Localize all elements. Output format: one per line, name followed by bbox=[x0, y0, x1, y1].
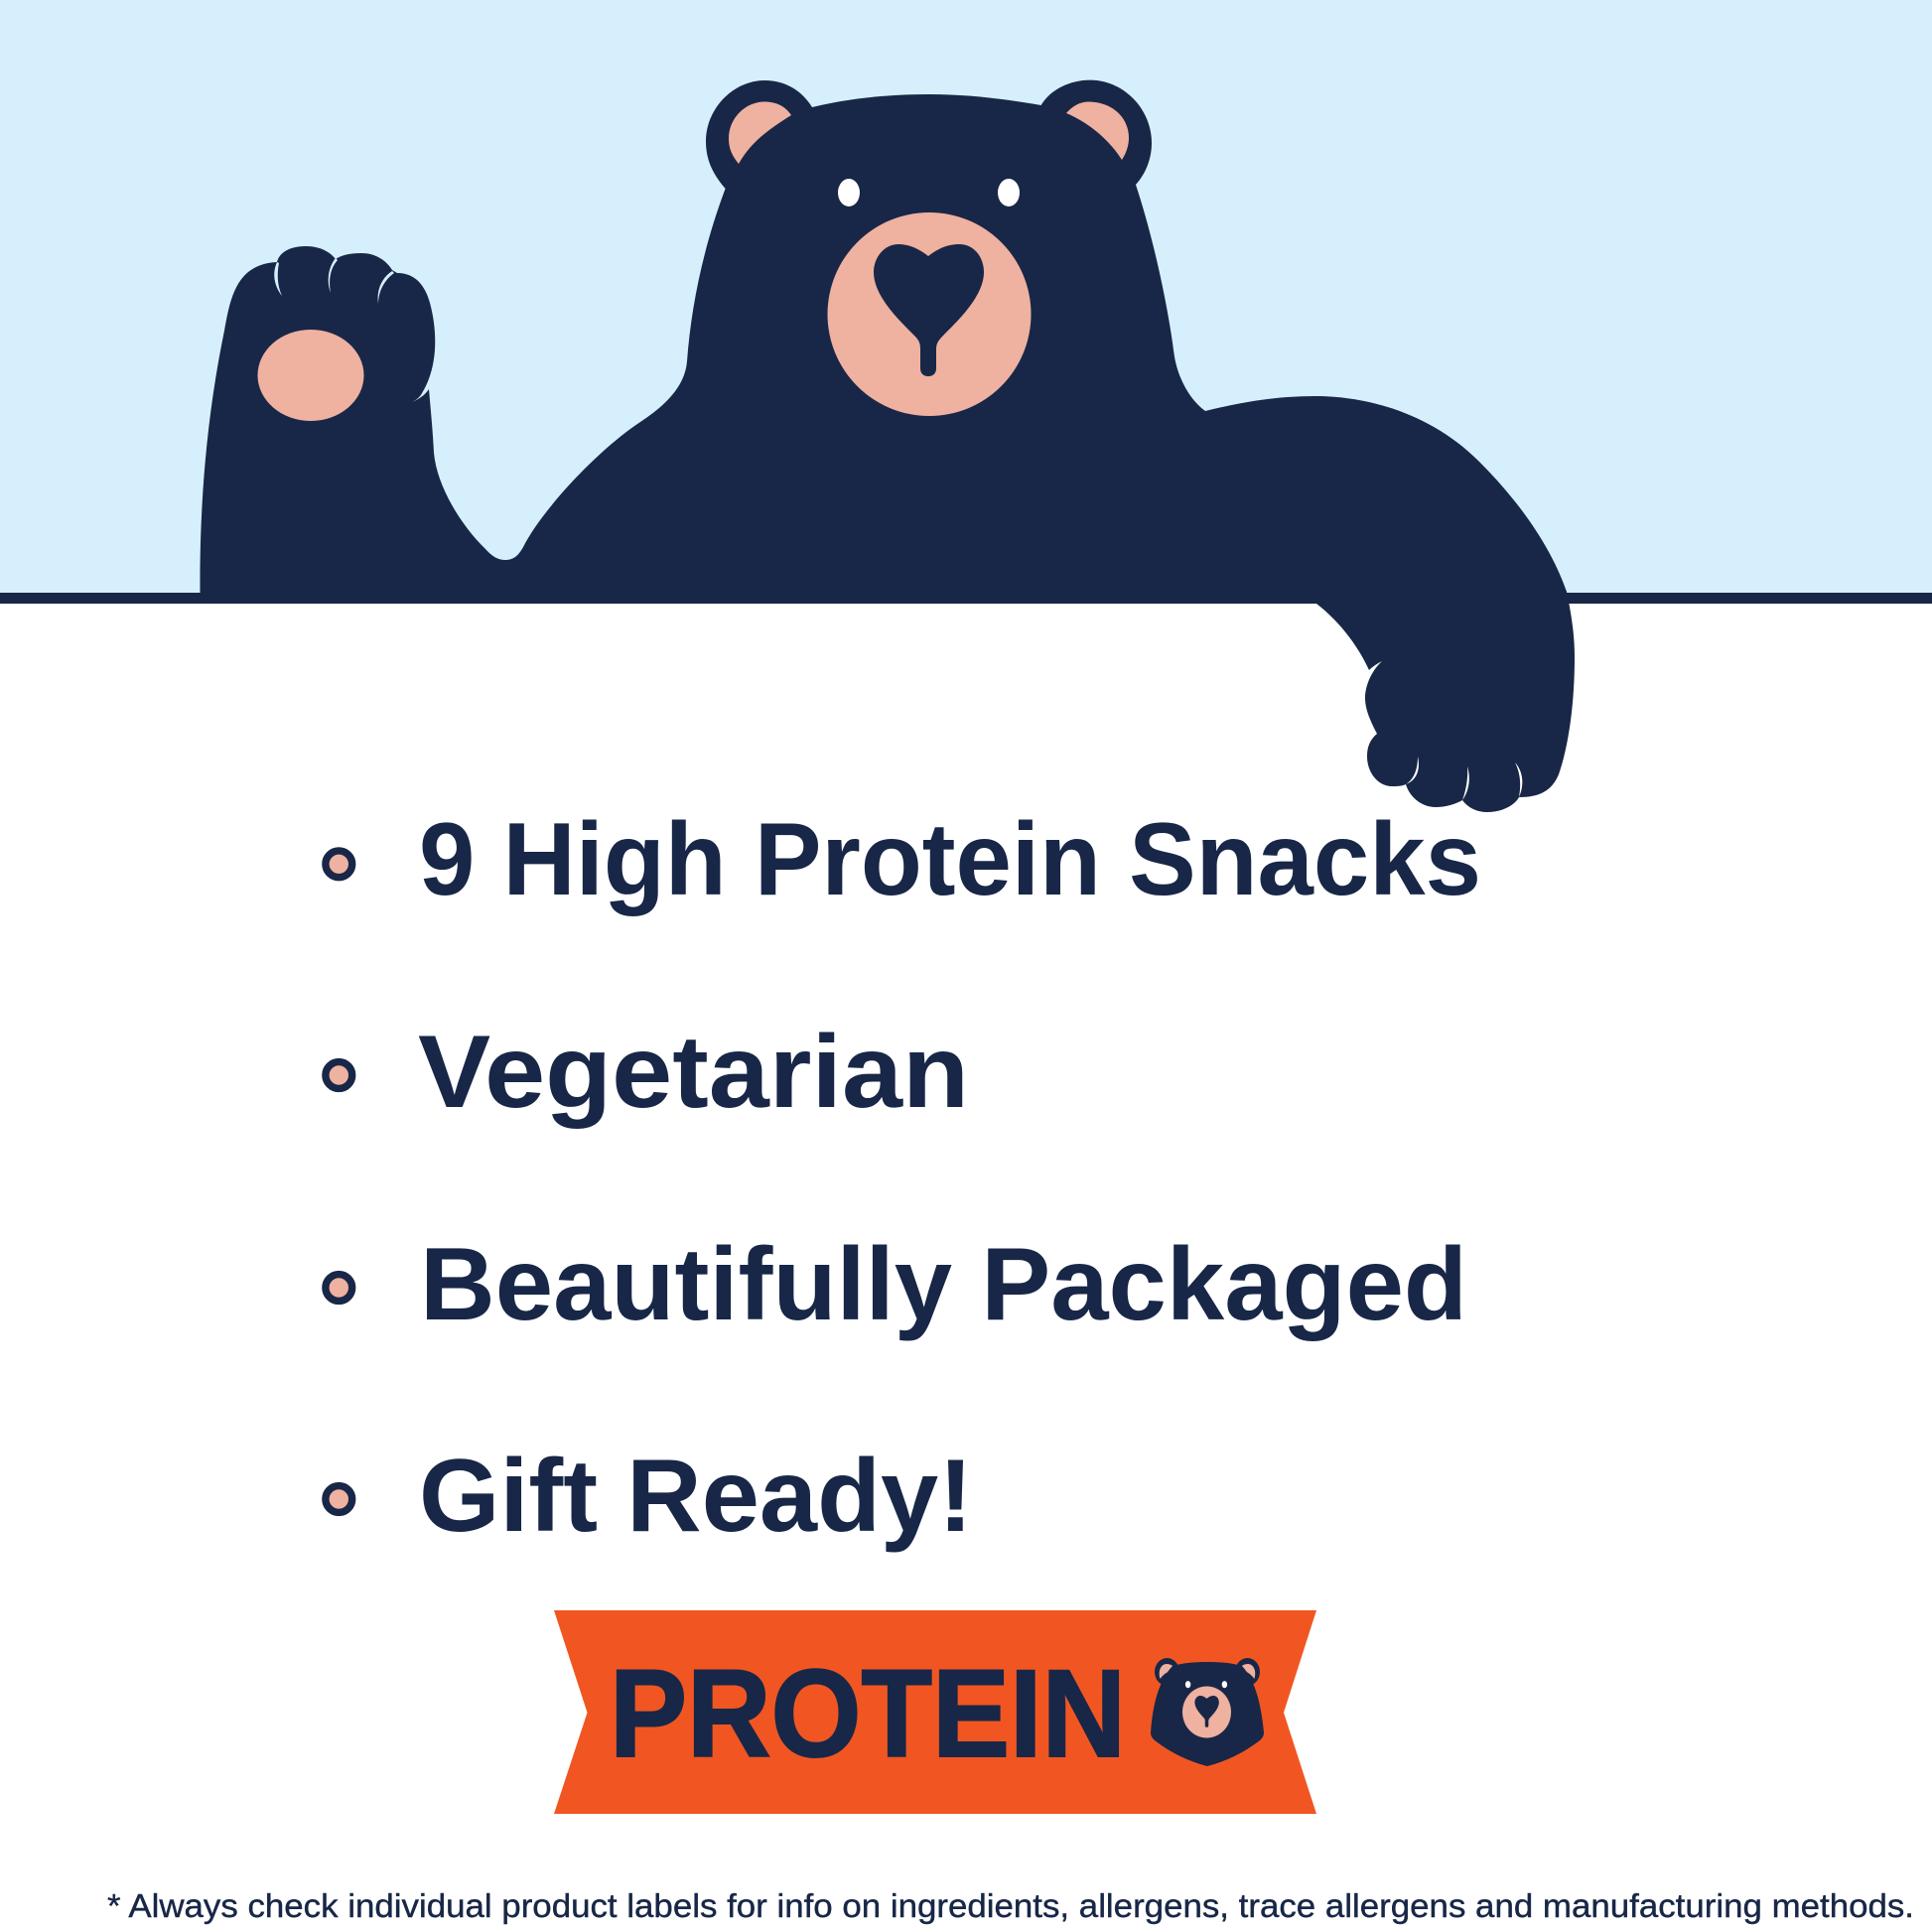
raised paw toe lines bbox=[274, 258, 394, 304]
logo ears bbox=[1155, 1658, 1260, 1686]
logo: small bear head bbox=[1151, 1658, 1264, 1766]
raised paw pad bbox=[258, 330, 363, 421]
banner ribbon bbox=[554, 1610, 1316, 1814]
left ear inner bbox=[729, 101, 791, 164]
bullet 1 bbox=[326, 851, 352, 878]
logo eyes bbox=[1185, 1681, 1227, 1688]
item: Vegetarian: Vegetarian bbox=[418, 1015, 969, 1130]
right eye bbox=[998, 179, 1020, 207]
right ear inner bbox=[1066, 101, 1129, 160]
heart nose bbox=[874, 244, 984, 376]
logo nose bbox=[1194, 1696, 1219, 1727]
bullet 4 bbox=[326, 1486, 352, 1512]
left eye bbox=[838, 179, 860, 207]
bear body silhouette bbox=[200, 80, 1575, 812]
hanging paw toe lines bbox=[1406, 757, 1522, 800]
footnote: * Always check individual product labels for info on ingredients, allergens, trace allergens and manufacturing methods. bbox=[107, 1887, 1914, 1924]
item: Gift Ready!: Gift Ready! bbox=[419, 1439, 973, 1554]
logo ear inners bbox=[1160, 1664, 1255, 1679]
item: Beautifully Packaged: Beautifully Packaged bbox=[420, 1227, 1467, 1342]
item: 9 High Protein Snacks: 9 High Protein Snacks bbox=[419, 802, 1481, 917]
panel: sky blue header bbox=[0, 0, 1932, 596]
banner wordmark: PROTEIN bbox=[610, 1645, 1126, 1783]
bullet 3 bbox=[326, 1275, 352, 1301]
bullet 2 bbox=[326, 1062, 352, 1088]
muzzle bbox=[828, 212, 1031, 416]
feature list bbox=[326, 802, 1481, 1554]
logo muzzle bbox=[1182, 1686, 1231, 1737]
ledge line bbox=[0, 593, 1932, 604]
illustration: bear leaning over ledge bbox=[200, 80, 1575, 812]
orange protein banner bbox=[554, 1610, 1316, 1814]
logo head shield bbox=[1151, 1662, 1264, 1766]
